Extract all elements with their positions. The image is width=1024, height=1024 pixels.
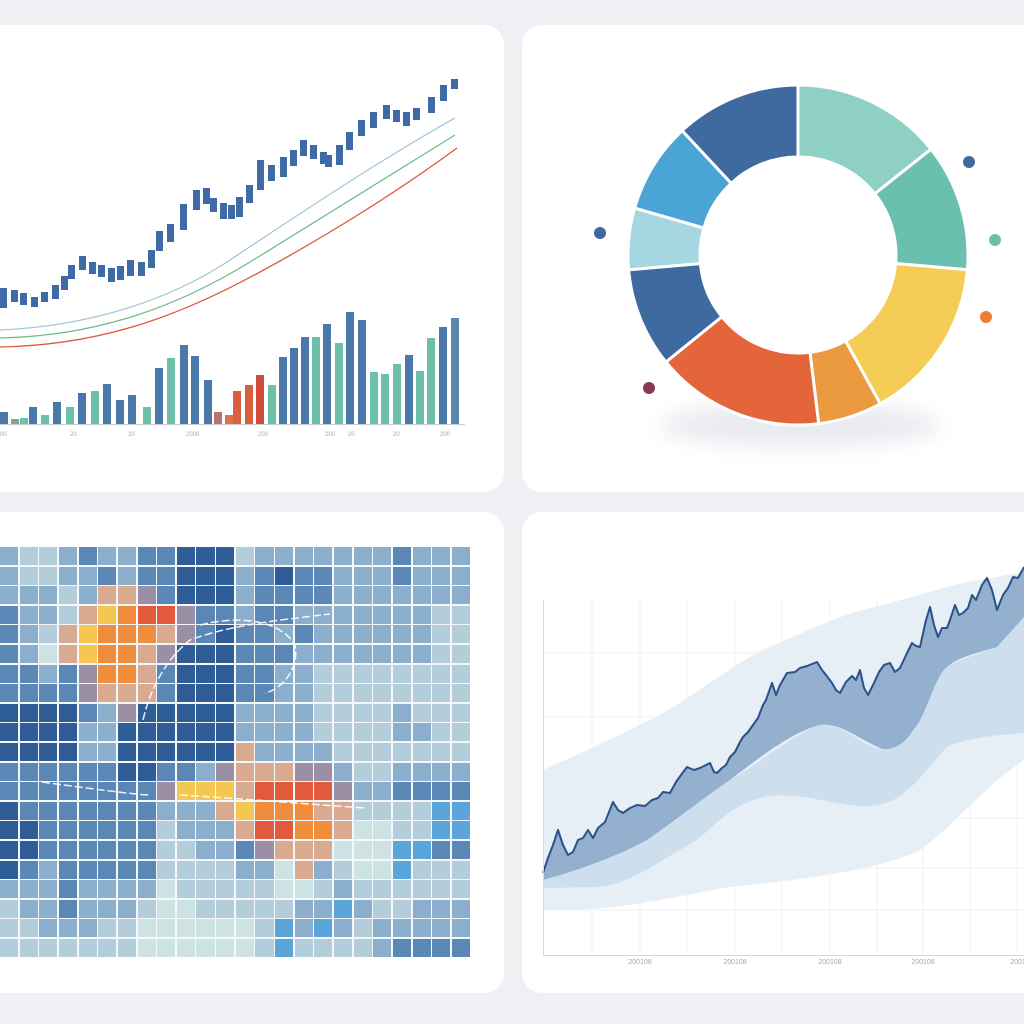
area chart [543,567,1024,966]
candlestick chart: 20 [128,432,135,438]
shadow [660,403,940,447]
candlestick chart: 200 [258,432,269,438]
grid [543,600,1024,953]
heatmap grid [0,547,470,957]
donut chart [594,85,1001,447]
axis labels [628,959,1024,966]
candlestick chart: 200 [325,432,336,438]
moving average lines [0,118,457,347]
panel: heatmap [0,512,504,993]
price line [543,567,1024,873]
candlestick chart: 200 [440,432,451,438]
legend dots [594,227,606,239]
candlestick chart: 20 [348,432,355,438]
panel: donut chart [522,25,1024,492]
x axis [0,424,465,426]
axis labels: 200108 [628,959,652,966]
axes [542,600,544,955]
candlestick chart: 2000 [186,432,200,438]
candlestick chart: 20 [70,432,77,438]
candlestick chart: 00 [0,432,7,438]
panel: candlestick chart [0,25,504,492]
panel: area chart [522,512,1024,993]
dark band [543,567,1024,880]
candlestick chart [0,79,465,438]
candlestick chart: 20 [393,432,400,438]
middle band [543,617,1024,888]
outer band [543,572,1024,910]
heatmap annotation strokes [42,614,365,808]
volume bars [0,312,459,424]
axis labels: 200108 [723,959,747,966]
axis labels: 200108 [911,959,935,966]
axis labels: 200108 [818,959,842,966]
candles [0,79,458,308]
